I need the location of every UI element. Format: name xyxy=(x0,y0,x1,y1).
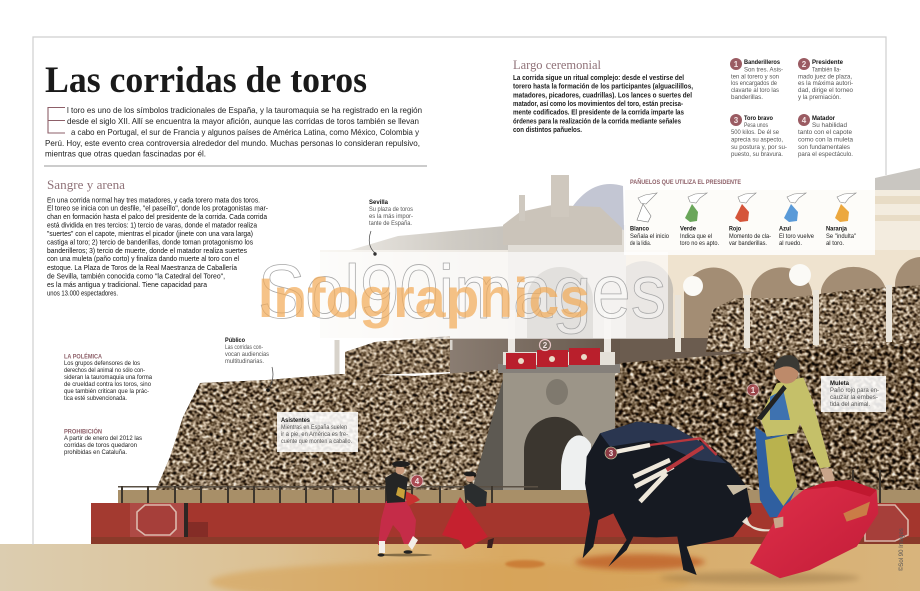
scene: plaza de toros illustration xyxy=(0,168,920,591)
callout: Público: Las corridas con- xyxy=(225,344,263,351)
watermark: Sol90images / Infographics: Infographics xyxy=(258,266,590,329)
item: pañuelo verde: Indica que el xyxy=(680,233,712,240)
callout: Público xyxy=(225,337,273,392)
figure: matador walking xyxy=(378,461,432,557)
numbered note 4: Matador: tanto con el capote xyxy=(798,129,853,136)
panel: Sangre y arena: con una muleta (paño corto) y finaliza dando muerte al toro con el xyxy=(47,254,239,263)
item: pañuelo verde: Verde xyxy=(680,226,696,232)
note: Prohibición: corridas de toros quedaron xyxy=(64,442,138,449)
note: La polémica: de crueldad contra los toros, sino xyxy=(64,381,152,388)
numbered note 1: Banderilleros: clavarte al toro las xyxy=(731,87,779,94)
numbered note 1: Banderilleros: los encargados de xyxy=(731,80,777,87)
panel: Sangre y arena xyxy=(47,177,269,298)
note: La polémica: que también critican que la prác- xyxy=(64,388,149,395)
crowd: upper stands xyxy=(345,285,920,376)
numbered note 1: Banderilleros xyxy=(730,58,783,101)
crowd: right stands xyxy=(470,343,920,492)
numbered note 2: Presidente: dad, dirige el torneo xyxy=(798,87,854,94)
panel: pañuelos que utiliza el presidente xyxy=(624,170,875,255)
panel: Sangre y arena: estoque. La Plaza de Toros de la Real Maestranza de Caballería xyxy=(47,263,237,272)
numbered note 3: Toro bravo: puesto, su bravura. xyxy=(731,151,783,158)
panel: Sangre y arena: unos 13.000 espectadores. xyxy=(47,288,118,298)
panel: Largo ceremonial: con distintos pañuelos. xyxy=(513,127,582,134)
numbered note 2: Presidente: y la premiación. xyxy=(798,94,841,101)
item: pañuelo azul: al ruedo. xyxy=(779,240,802,247)
callout: Muleta: Paño rojo para en- xyxy=(830,387,879,394)
numbered note 4: Matador xyxy=(798,114,854,158)
heading: pañuelos: PAÑUELOS QUE UTILIZA EL PRESIDENTE xyxy=(630,177,742,186)
right wing upper facade xyxy=(875,168,920,190)
intro text block: Perú. Hoy, este evento crea controversia alrededor del mundo. Muchas personas lo consideran repulsivo, xyxy=(45,138,420,148)
callout: Sevilla: Su plaza de toros xyxy=(369,206,413,213)
number markers in scene xyxy=(411,340,759,487)
intro text block xyxy=(45,105,422,158)
note: La polémica: sideran la tauromaquia una forma xyxy=(64,374,153,381)
note: Prohibición: PROHIBICIÓN xyxy=(64,426,102,436)
numbered note 1: Banderilleros: 1 xyxy=(734,60,739,69)
numbered note 3: Toro bravo xyxy=(730,114,787,158)
item: pañuelo naranja: Naranja xyxy=(826,226,847,232)
item: pañuelo blanco: de la lidia. xyxy=(630,240,651,247)
callout: Sevilla: Sevilla xyxy=(369,199,388,206)
callout: Público: vocan audiencias xyxy=(225,351,269,358)
numbered note 4: Matador: Matador xyxy=(812,115,835,122)
note: Prohibición: A partir de enero del 2012 las xyxy=(64,435,142,442)
note: La polémica: derechos del animal no sólo con- xyxy=(64,367,145,374)
numbered note 2: Presidente: mado juez de plaza, xyxy=(798,74,852,80)
item: pañuelo rojo: var banderillas. xyxy=(729,240,767,247)
heading: Sangre y arena: Sangre y arena xyxy=(47,177,125,192)
panel: Sangre y arena: castiga al toro; 2) tercio de banderillas, donde toman protagonismo los xyxy=(47,238,253,246)
item: pañuelo naranja: al toro. xyxy=(826,240,844,247)
gate: presidential box xyxy=(472,348,620,492)
numbered note 4: Matador: son fundamentales xyxy=(798,144,850,151)
watermark: Sol90images / Infographics: Sol90images xyxy=(258,250,666,335)
page frame xyxy=(33,37,886,545)
panel: Largo ceremonial: matadores, picadores, cuadrillas). Los lances o suertes del xyxy=(513,92,692,100)
callout: Muleta: tida del animal. xyxy=(830,401,870,408)
figure: main matador with muleta xyxy=(750,355,878,578)
ground: sand xyxy=(0,544,920,591)
panel: Largo ceremonial: La corrida sigue un ritual complejo: desde el vestirse del xyxy=(513,75,684,82)
numbered note 2: Presidente xyxy=(798,58,854,101)
callout: Asistentes: Asistentes xyxy=(281,417,310,424)
panel: Sangre y arena: chan en formación hasta el palco del presidente de la corrida. Cada corrida xyxy=(47,212,267,221)
item: pañuelo verde: toro no es apto. xyxy=(680,240,719,247)
panel: Largo ceremonial: matador, así como los movimientos del toro, están precisa- xyxy=(513,101,684,108)
panel: Sangre y arena: El toreo se inicia con un desfile, "el paseíllo", donde los protagonistas mar- xyxy=(47,204,269,212)
callout: Sevilla: tante de España. xyxy=(369,220,412,227)
callout: Asistentes: ir a pie, en América es fre- xyxy=(281,431,348,438)
numbered note 1: Banderilleros: Banderilleros xyxy=(744,59,780,66)
numbered note 2: Presidente: También lla- xyxy=(812,66,841,74)
panel: Sangre y arena: de Sevilla, también conocida como "la Catedral del Toreo", xyxy=(47,272,225,280)
note: Prohibición xyxy=(64,426,142,456)
note: La polémica: Los grupos defensores de los xyxy=(64,360,140,367)
numbered note 2: Presidente: es la máxima autori- xyxy=(798,80,853,87)
item: pañuelo azul: El toro vuelve xyxy=(779,233,815,240)
callout: Asistentes: Mientras en España suelen xyxy=(281,424,347,431)
panel: Largo ceremonial: órdenes para la realización de la corrida mediante señales xyxy=(513,118,681,126)
figure: bull xyxy=(583,422,773,575)
item: pañuelo blanco: Señala el inicio xyxy=(630,233,670,240)
callout: Asistentes: cuente que monten a caballo. xyxy=(281,438,352,445)
callout: Público: Público xyxy=(225,337,245,344)
number markers in scene: 4 xyxy=(415,477,420,486)
numbered note 3: Toro bravo: Toro bravo xyxy=(744,115,773,122)
panel: Largo ceremonial: torero hasta la formación de los participantes (alguacilillos, xyxy=(513,84,693,90)
panel: Sangre y arena: "suertes" con el capote, mientras el picador (jinete con una vara larga) xyxy=(47,229,253,238)
number markers in scene: 1 xyxy=(751,386,756,395)
numbered note 4: Matador: 4 xyxy=(802,116,807,125)
item: pañuelo verde xyxy=(680,193,719,247)
numbered note 3: Toro bravo: aprecia su aspecto, xyxy=(731,136,783,144)
numbered note 1: Banderilleros: banderillas. xyxy=(731,94,763,101)
item: pañuelo rojo: Momento de cla- xyxy=(729,233,771,240)
note: La polémica xyxy=(64,352,153,402)
item: pañuelo azul: Azul xyxy=(779,226,791,232)
intro text block: desde el siglo XII. Allí se encuentra la mayor afición, aunque las corridas de toros también se llevan xyxy=(67,116,419,126)
callout: Asistentes xyxy=(277,412,358,452)
item: pañuelo blanco: Blanco xyxy=(630,226,649,232)
numbered note 2: Presidente: Presidente xyxy=(812,59,843,66)
numbered note 3: Toro bravo: Pesa unos xyxy=(744,122,768,129)
numbered note 3: Toro bravo: 3 xyxy=(734,116,739,125)
numbered note 3: Toro bravo: su postura y, por su- xyxy=(731,144,787,151)
callout: Muleta: Muleta xyxy=(830,380,849,387)
callout: Sevilla: es la más impor- xyxy=(369,213,413,220)
item: pañuelo azul xyxy=(779,193,815,247)
note: La polémica: tica esté subvencionada. xyxy=(64,395,127,402)
panel: Sangre y arena: banderilleros; 3) tercio de muerte, donde el matador realiza suertes xyxy=(47,246,247,255)
panel: Sangre y arena: es la más antigua y tradicional. Tiene capacidad para xyxy=(47,280,207,289)
intro text block: l toro es uno de los símbolos tradicionales de España, y la tauromaquia se ha registrado en la región xyxy=(67,105,422,115)
crowd: left stands xyxy=(155,368,510,492)
numbered note 1: Banderilleros: Son tres. Asis- xyxy=(744,66,783,74)
numbered note 4: Matador: Su habilidad xyxy=(812,122,848,129)
item: pañuelo blanco xyxy=(630,193,670,247)
panel: Largo ceremonial xyxy=(513,57,693,134)
callout: Sevilla xyxy=(369,199,413,256)
item: pañuelo rojo: Rojo xyxy=(729,226,741,232)
panel: Sangre y arena: En una corrida normal hay tres matadores, y cada torero mata dos toros. xyxy=(47,196,260,204)
number markers in scene: 2 xyxy=(543,341,548,350)
fence: barrier rail xyxy=(118,470,920,505)
item: pañuelo naranja: Se "indulta" xyxy=(826,233,856,240)
number markers in scene: 3 xyxy=(609,449,614,458)
callout: Público: multitudinarias. xyxy=(225,358,264,365)
right arches xyxy=(620,250,920,350)
item: pañuelo naranja xyxy=(826,193,856,247)
intro text block: a cabo en Portugal, el sur de Francia y algunos países de América Latina, como México, Colombia y xyxy=(71,127,420,137)
panel: Sangre y arena: está dividida en tres tercios: 1) tercio de varas, donde el matador realiza xyxy=(47,220,257,230)
intro text block: mientras que otras quedan fascinadas por él. xyxy=(45,148,206,158)
note: Prohibición: prohibidas en Cataluña. xyxy=(64,449,127,456)
title: Las corridas de toros xyxy=(45,60,367,101)
central tower xyxy=(508,225,626,350)
lower gallery xyxy=(450,338,625,378)
icon: drop cap E xyxy=(48,108,65,133)
figure: subalterno with cape xyxy=(442,472,494,549)
callout: Muleta xyxy=(821,376,886,412)
wall: red barrera xyxy=(91,503,920,544)
numbered note 1: Banderilleros: ten al torero y son xyxy=(731,74,780,80)
credit: ©Sol 90 Images xyxy=(898,528,905,571)
numbered note 4: Matador: para el espectáculo. xyxy=(798,151,853,158)
item: pañuelo rojo xyxy=(729,193,771,247)
heading: Largo ceremonial: Largo ceremonial xyxy=(513,57,601,72)
numbered note 3: Toro bravo: 500 kilos. De él se xyxy=(731,129,780,136)
callout: Muleta: cauzar la embes- xyxy=(830,394,878,401)
note: La polémica: LA POLÉMICA xyxy=(64,352,102,360)
numbered note 4: Matador: como con la muleta xyxy=(798,136,854,144)
panel: Largo ceremonial: mente codificados. El presidente de la corrida imparte las xyxy=(513,110,684,116)
numbered note 2: Presidente: 2 xyxy=(802,60,807,69)
building: plaza facade xyxy=(320,168,920,378)
